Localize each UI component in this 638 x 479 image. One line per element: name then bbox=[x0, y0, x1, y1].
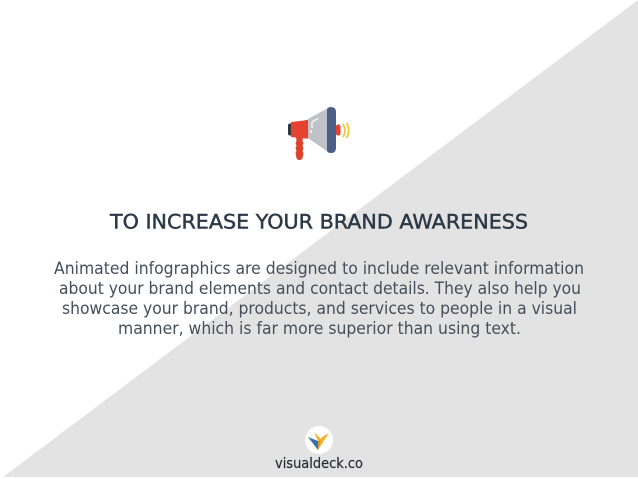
body text: manner, which is far more superior than using text. bbox=[118, 319, 521, 338]
logo: visualdeck.co bbox=[275, 426, 363, 472]
body text: about your brand elements and contact details. They also help you bbox=[59, 279, 581, 298]
logo mark bbox=[305, 426, 333, 454]
body text bbox=[54, 259, 584, 338]
heading: TO INCREASE YOUR BRAND AWARENESS bbox=[109, 210, 528, 234]
logo wordmark: visualdeck.co bbox=[275, 456, 363, 472]
icon: megaphone bbox=[288, 107, 349, 160]
body text: showcase your brand, products, and services to people in a visual bbox=[62, 299, 577, 318]
body text: Animated infographics are designed to include relevant information bbox=[54, 259, 584, 278]
